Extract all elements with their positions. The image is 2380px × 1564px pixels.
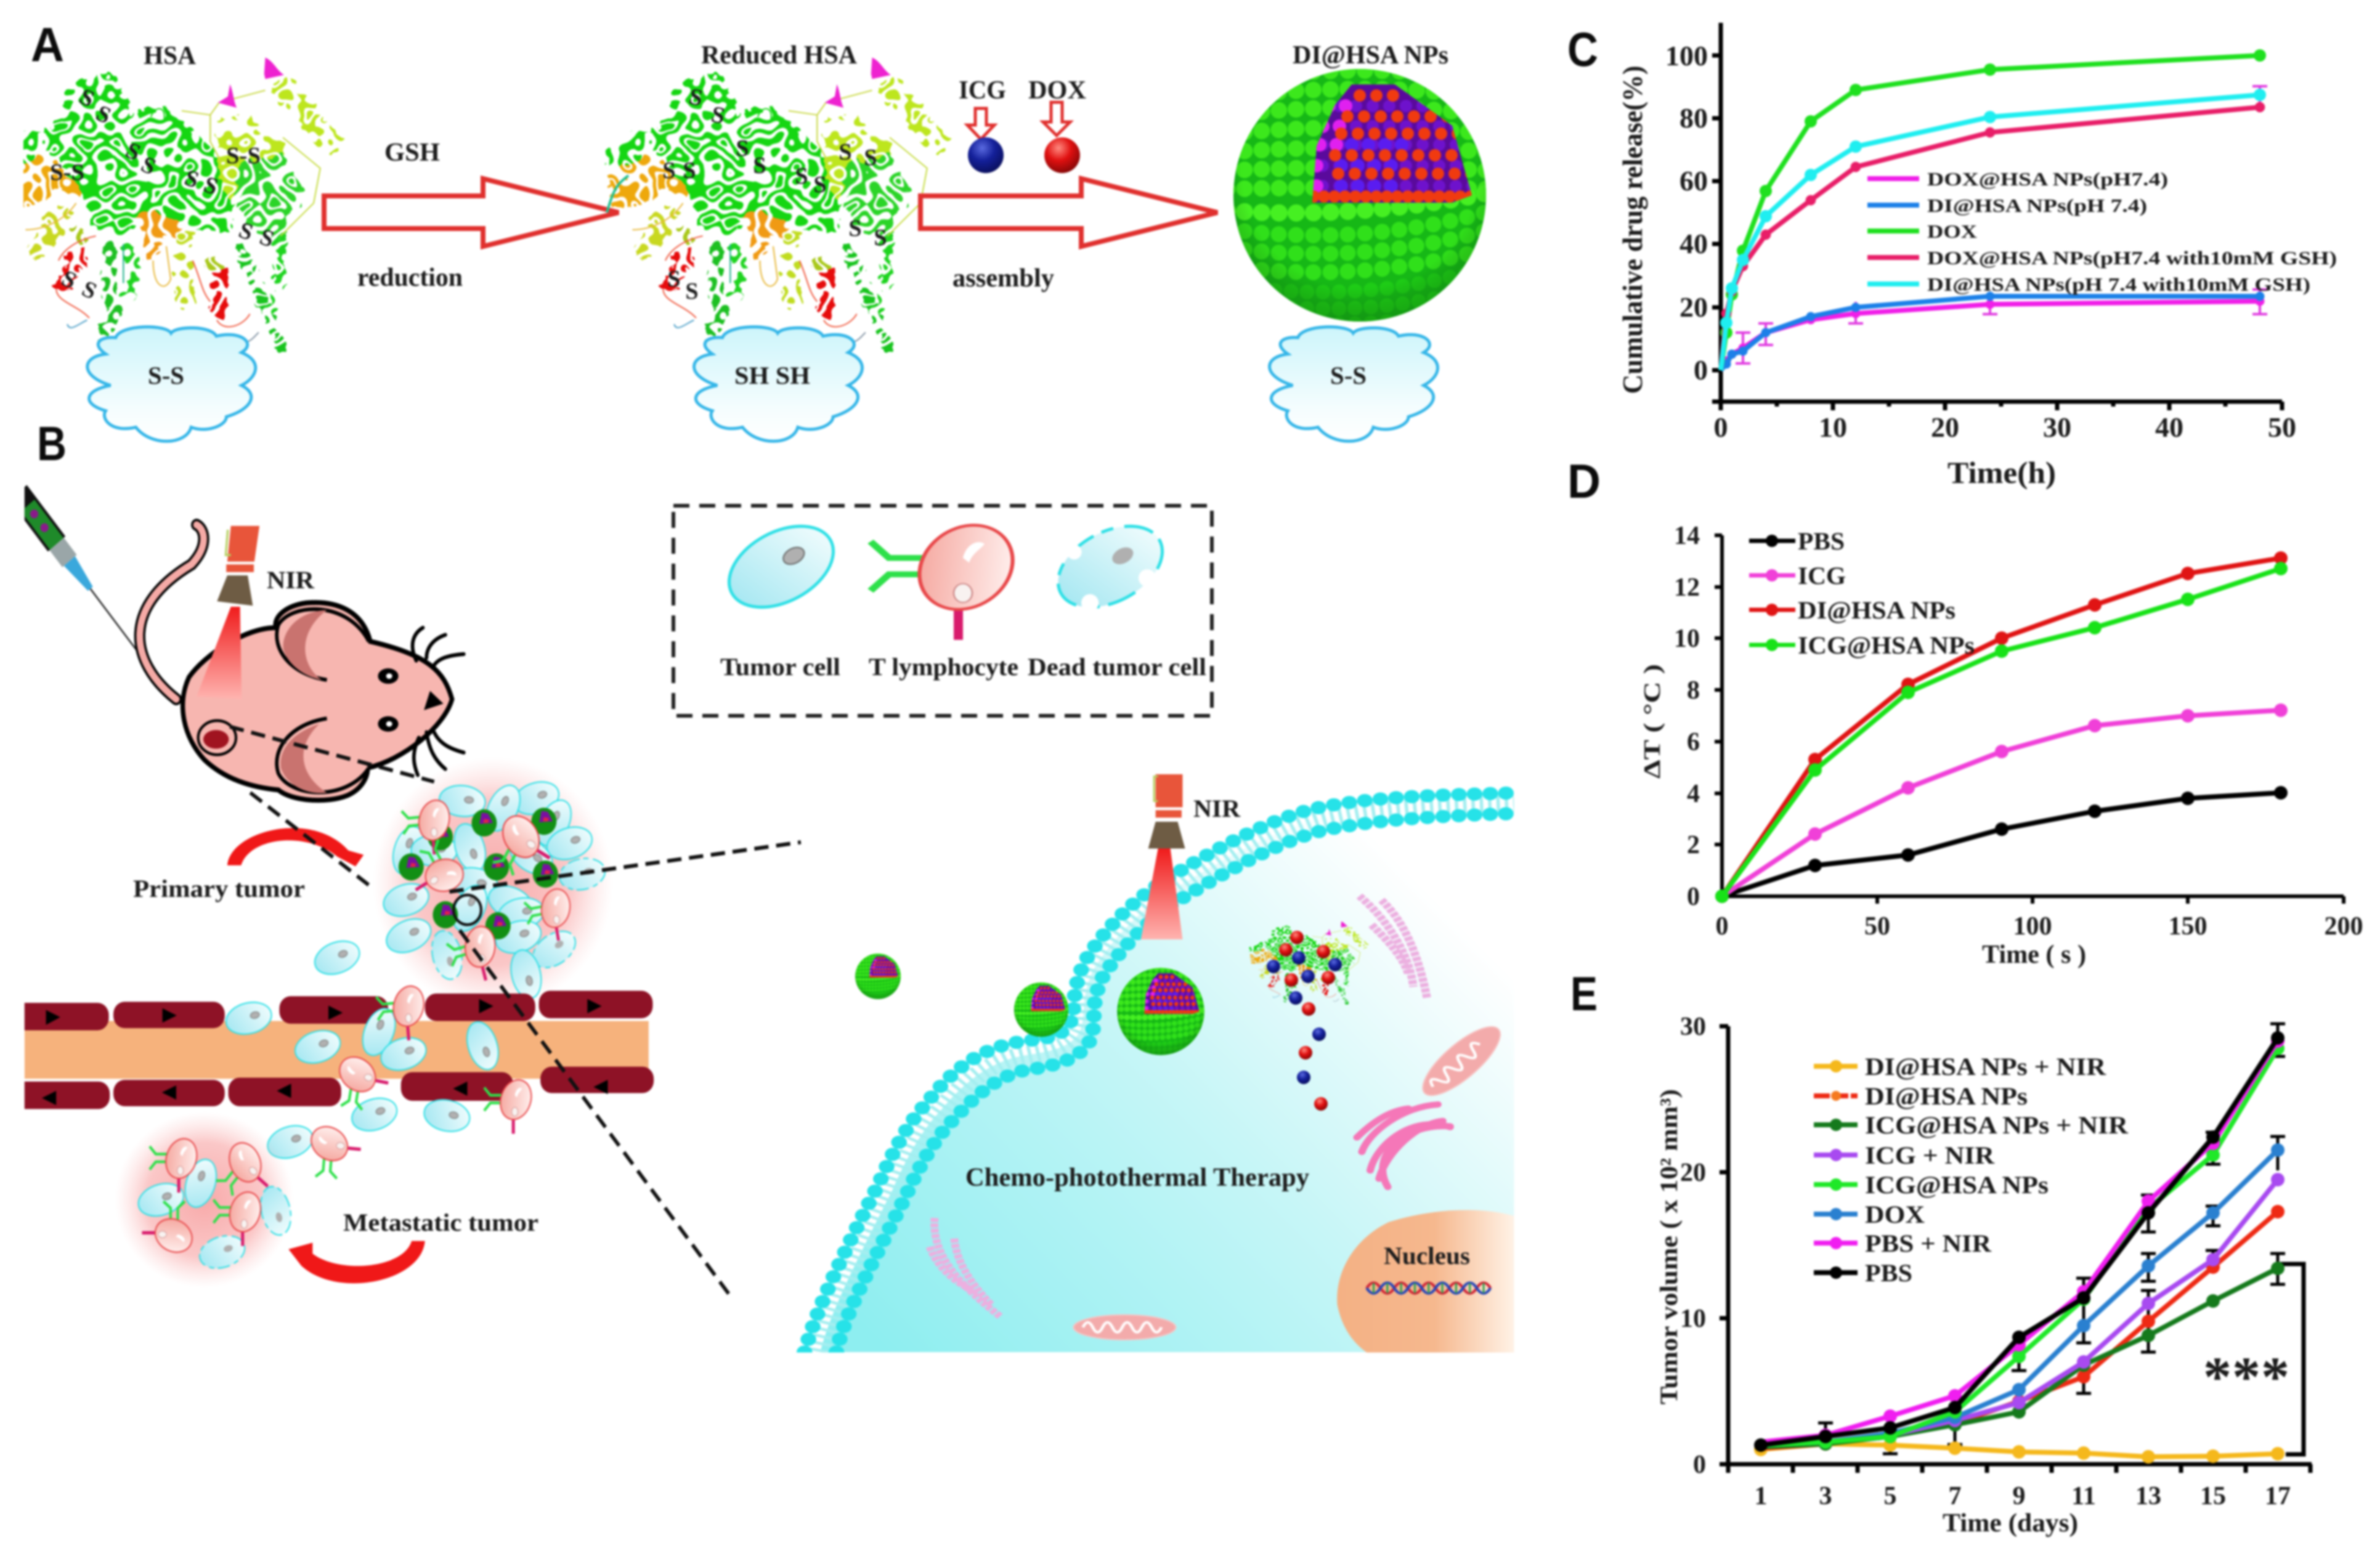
- legend text: tumor cell: Tumor cell: [720, 653, 840, 681]
- E x tick labels: 11: [2071, 1482, 2096, 1510]
- cloud S-S right: [1270, 327, 1438, 441]
- series ICG@HSA NPs: [1761, 1048, 2278, 1445]
- series ICG@HSA NPs: [1722, 569, 2281, 896]
- D y tick labels: 14: [1674, 522, 1700, 550]
- mitochondrion bottom: [1074, 1315, 1176, 1340]
- released drug balls: blue: [1267, 951, 1342, 1084]
- E x tick labels: 15: [2200, 1482, 2226, 1510]
- label ICG: ICG: [959, 76, 1006, 105]
- endoplasmic reticulum top: [1359, 896, 1427, 999]
- C legend: DI@HSA NPs(pH 7.4 with10mM GSH): [1927, 273, 2310, 295]
- icon: DOX down arrow: [1043, 102, 1070, 136]
- C error bars: [1736, 86, 2267, 363]
- E x tick labels: 1: [1755, 1482, 1767, 1510]
- laser head: [217, 526, 259, 606]
- D y tick labels: [1674, 522, 1700, 911]
- series ICG: [1722, 710, 2281, 896]
- E legend: PBS: [1865, 1259, 1912, 1287]
- E y tick labels: 10: [1680, 1305, 1706, 1333]
- D legend: ICG@HSA NPs: [1798, 631, 1975, 659]
- E y axis title: Tumor volume ( x 10² mm³): [1655, 1089, 1683, 1404]
- C legend: DOX: [1927, 221, 1978, 242]
- significance stars: ***: [2203, 1345, 2289, 1408]
- D x tick labels: [1715, 912, 2363, 941]
- label NIR cell: NIR: [1193, 795, 1241, 822]
- C tick labels: 20: [1679, 291, 1708, 323]
- E y tick labels: [1680, 1013, 1706, 1479]
- cloud S-S left: [87, 327, 256, 441]
- series DOX: [1721, 55, 2260, 370]
- D x tick labels: 0: [1715, 912, 1729, 941]
- SH labels reduced HSA: S: [795, 163, 808, 189]
- SH labels reduced HSA: S: [685, 278, 699, 304]
- series ICG + NIR: [1761, 1180, 2278, 1445]
- E y tick labels: 20: [1680, 1159, 1706, 1187]
- label GSH: GSH: [384, 139, 440, 167]
- SH labels reduced HSA: S: [839, 139, 852, 165]
- inner upper ear: [283, 610, 327, 680]
- panel C: drug release chart: [1567, 22, 2337, 490]
- D y tick labels: 10: [1674, 625, 1700, 653]
- icon: DOX red ball: [1044, 137, 1080, 173]
- C tick labels: [1665, 40, 1708, 386]
- legend: T lymphocyte icon: [871, 514, 1029, 640]
- series PBS: [1761, 1038, 2278, 1445]
- SH labels reduced HSA: S: [753, 153, 766, 179]
- nanoparticle inside cell: [1115, 968, 1206, 1056]
- arrow: to metastatic tumour: [288, 1241, 425, 1283]
- series DOX@HSA NPs pH7.4: [1721, 301, 2260, 370]
- mouse eyes and nose: [378, 668, 444, 732]
- icon: ICG down arrow: [967, 108, 994, 139]
- S-S bond labels HSA: S: [235, 217, 256, 246]
- E x tick labels: 7: [1948, 1482, 1962, 1510]
- E x tick labels: [1755, 1482, 2291, 1510]
- series ICG@HSA NPs + NIR: [1761, 1268, 2278, 1447]
- blood vessel: [5, 991, 654, 1109]
- C x tick labels: 50: [2268, 411, 2296, 443]
- released drug balls: red: [1279, 931, 1335, 1111]
- C y axis title: Cumulative drug release(%): [1617, 65, 1648, 394]
- SH labels reduced HSA: S: [864, 145, 877, 171]
- S-S bond labels HSA: S: [256, 224, 277, 253]
- Golgi apparatus: [1357, 1104, 1450, 1187]
- E legend: DOX: [1865, 1201, 1925, 1228]
- S-S bond labels HSA: S-S: [50, 160, 84, 185]
- cytoplasm: [820, 803, 1514, 1352]
- mouse and tumour scene: [5, 485, 801, 1296]
- E legend: [1814, 1053, 2129, 1287]
- C x tick labels: 10: [1819, 411, 1847, 443]
- C axes: [1712, 23, 2282, 410]
- DNA: [1367, 1282, 1490, 1294]
- nanoparticle entering cell: [1013, 983, 1070, 1037]
- C legend: [1867, 168, 2337, 295]
- bracket: [2278, 1264, 2304, 1454]
- mouse lower ear: [277, 718, 369, 792]
- mitochondrion right: [1411, 1018, 1511, 1104]
- panel A: protein assembly: [2, 17, 1492, 441]
- arrow GSH reduction: [324, 179, 619, 246]
- E x tick labels: 13: [2135, 1482, 2161, 1510]
- S-S bond labels HSA: S: [58, 265, 81, 294]
- E legend: ICG + NIR: [1865, 1141, 1995, 1169]
- linker strand: [607, 176, 628, 213]
- panel D: temperature chart: [1567, 454, 2363, 969]
- zoom dashed lines: [230, 727, 801, 1296]
- E legend: ICG@HSA NPs + NIR: [1865, 1111, 2129, 1139]
- E y tick labels: 0: [1693, 1451, 1706, 1479]
- label DOX: DOX: [1028, 76, 1086, 105]
- primary tumour spot: [198, 721, 236, 755]
- SH labels reduced HSA: S: [848, 216, 862, 241]
- D legend: [1749, 527, 1975, 659]
- E error bars: [1818, 1024, 2285, 1454]
- S-S bond labels HSA: S-S: [226, 143, 261, 169]
- D x tick labels: 50: [1864, 912, 1890, 941]
- icon: syringe: [23, 484, 137, 650]
- cell interior scene: [805, 774, 1514, 1353]
- primary tumour cell cluster: [380, 777, 607, 1002]
- nanoparticle outside cell: [854, 954, 902, 1000]
- D y tick labels: 0: [1687, 883, 1700, 911]
- D y tick labels: 4: [1687, 780, 1700, 808]
- C x tick labels: 30: [2043, 411, 2071, 443]
- C legend: DOX@HSA NPs(pH7.4): [1927, 168, 2168, 190]
- E legend: DI@HSA NPs + NIR: [1865, 1053, 2106, 1080]
- arrow: to primary tumour: [227, 828, 363, 867]
- endoplasmic reticulum bottom: [930, 1218, 1001, 1317]
- label B: B: [37, 416, 67, 471]
- S-S bond labels HSA: S: [122, 137, 145, 166]
- SH labels reduced HSA: S: [662, 158, 676, 184]
- D axes: [1715, 535, 2344, 904]
- heading Reduced HSA: Reduced HSA: [701, 41, 858, 70]
- lens circle: [453, 895, 481, 925]
- label Primary tumor: Primary tumor: [133, 875, 305, 902]
- E x tick labels: 3: [1819, 1482, 1832, 1510]
- C x tick labels: 0: [1714, 411, 1728, 443]
- C legend: DOX@HSA NPs(pH7.4 with10mM GSH): [1927, 247, 2337, 269]
- legend: dead tumor cell icon: [1043, 508, 1177, 625]
- D y tick labels: 2: [1687, 831, 1700, 859]
- D y tick labels: 12: [1674, 573, 1700, 602]
- primary tumour glow: [373, 757, 613, 1010]
- D y tick labels: 8: [1687, 676, 1700, 705]
- series DOX@HSA NPs GSH: [1721, 107, 2260, 370]
- D x tick labels: 100: [2013, 912, 2052, 941]
- C x tick labels: 40: [2155, 411, 2183, 443]
- protein: HSA: [2, 57, 331, 347]
- heading DI@HSA NPs: DI@HSA NPs: [1293, 41, 1448, 70]
- E legend: DI@HSA NPs: [1865, 1082, 2028, 1110]
- C tick labels: 100: [1665, 40, 1708, 71]
- circulating cells: [223, 936, 537, 1181]
- nanoparticle sphere: [1227, 69, 1492, 325]
- cloud SH SH: [694, 327, 862, 441]
- dissolved protein: [1250, 922, 1364, 1003]
- C tick labels: 0: [1694, 354, 1708, 386]
- series DI@HSA NPs + NIR: [1761, 1444, 2278, 1457]
- mouse tail: [140, 525, 204, 699]
- D legend: ICG: [1798, 562, 1846, 590]
- D legend: DI@HSA NPs: [1798, 596, 1956, 624]
- nucleus: [1337, 1210, 1514, 1353]
- legend text: T lymphocyte: T lymphocyte: [869, 653, 1018, 681]
- legend text: dead tumor cell: Dead tumor cell: [1028, 653, 1206, 681]
- label assembly: assembly: [952, 264, 1054, 293]
- S-S bond labels HSA: S: [78, 276, 101, 305]
- arrow assembly: [920, 179, 1217, 246]
- icon: ICG blue ball: [968, 137, 1004, 173]
- C tick labels: 80: [1679, 102, 1708, 134]
- C x tick labels: 20: [1931, 411, 1959, 443]
- E y tick labels: 30: [1680, 1013, 1706, 1041]
- laser head in cell view: [1148, 774, 1185, 849]
- laser beam in cell view: [1141, 849, 1182, 939]
- mouse whiskers: [413, 628, 464, 775]
- panel B: therapy schematic: [5, 416, 1514, 1353]
- protein: reduced HSA: [609, 57, 938, 347]
- metastatic tumour cells: [135, 1129, 296, 1273]
- S-S bond labels HSA: S: [76, 84, 99, 113]
- E legend: PBS + NIR: [1865, 1230, 1992, 1257]
- SH labels reduced HSA: S: [874, 225, 887, 251]
- label NIR mouse: NIR: [267, 566, 315, 594]
- SH labels reduced HSA: S: [683, 158, 696, 184]
- D y tick labels: 6: [1687, 728, 1700, 756]
- label A: A: [31, 17, 64, 71]
- E legend: ICG@HSA NPs: [1865, 1171, 2049, 1199]
- label E: E: [1570, 966, 1598, 1021]
- cell membrane bilayer: [805, 793, 1514, 1352]
- D y axis title: ΔT ( °C ): [1639, 664, 1665, 779]
- label Nucleus: Nucleus: [1384, 1242, 1470, 1270]
- SH labels reduced HSA: S: [709, 102, 727, 129]
- series DOX: [1761, 1150, 2278, 1445]
- inner lower ear: [281, 724, 327, 793]
- series PBS + NIR: [1761, 1041, 2278, 1442]
- panel E: tumor volume chart: [1570, 966, 2312, 1538]
- mouse upper ear: [277, 609, 369, 680]
- D x tick labels: 200: [2324, 912, 2363, 941]
- E x tick labels: 5: [1884, 1482, 1896, 1510]
- E x axis title: Time (days): [1943, 1509, 2078, 1538]
- laser beam: [197, 607, 242, 699]
- D legend: PBS: [1798, 527, 1845, 555]
- SH labels reduced HSA: S: [813, 172, 827, 198]
- SH labels reduced HSA: S: [667, 266, 681, 292]
- series PBS: [1722, 793, 2281, 896]
- legend: tumor cell icon: [715, 509, 847, 624]
- C legend: DI@HSA NPs(pH 7.4): [1927, 195, 2147, 216]
- series DI@HSA NPs GSH: [1721, 95, 2260, 370]
- legend box: [673, 506, 1212, 716]
- S-S bond labels HSA: S: [92, 100, 115, 129]
- label Metastatic tumor: Metastatic tumor: [343, 1209, 538, 1236]
- series DI@HSA NPs: [1722, 558, 2281, 896]
- C x tick labels: [1714, 411, 2296, 443]
- label Chemo-photothermal Therapy: Chemo-photothermal Therapy: [965, 1164, 1309, 1192]
- SH labels reduced HSA: [662, 84, 887, 304]
- series DI@HSA NPs pH7.4: [1721, 296, 2260, 370]
- C tick labels: 40: [1679, 228, 1708, 259]
- S-S bond labels HSA: S: [200, 171, 221, 200]
- cloud label SH SH: SH SH: [734, 362, 810, 389]
- metastatic tumour glow: [115, 1112, 294, 1288]
- label reduction: reduction: [357, 264, 463, 292]
- D x axis title: Time ( s ): [1982, 941, 2086, 969]
- S-S bond labels HSA: S: [137, 152, 160, 180]
- label D: D: [1567, 454, 1601, 508]
- C x axis title: Time(h): [1947, 455, 2056, 490]
- cloud label S-S left: S-S: [148, 362, 184, 389]
- heading HSA: HSA: [144, 42, 197, 70]
- C tick labels: 60: [1679, 165, 1708, 197]
- mouse tail fill: [140, 525, 204, 699]
- E x tick labels: 9: [2012, 1482, 2026, 1510]
- series DI@HSA NPs: [1761, 1212, 2278, 1448]
- SH labels reduced HSA: S: [736, 136, 749, 161]
- label C: C: [1567, 22, 1598, 76]
- E x tick labels: 17: [2265, 1482, 2291, 1510]
- S-S bond labels HSA: [50, 84, 277, 305]
- mouse body: [183, 602, 452, 800]
- D x tick labels: 150: [2169, 912, 2207, 941]
- S-S bond labels HSA: S: [181, 164, 202, 193]
- E axes: [1720, 1026, 2312, 1473]
- cloud label S-S right: S-S: [1330, 362, 1367, 389]
- SH labels reduced HSA: S: [687, 84, 705, 111]
